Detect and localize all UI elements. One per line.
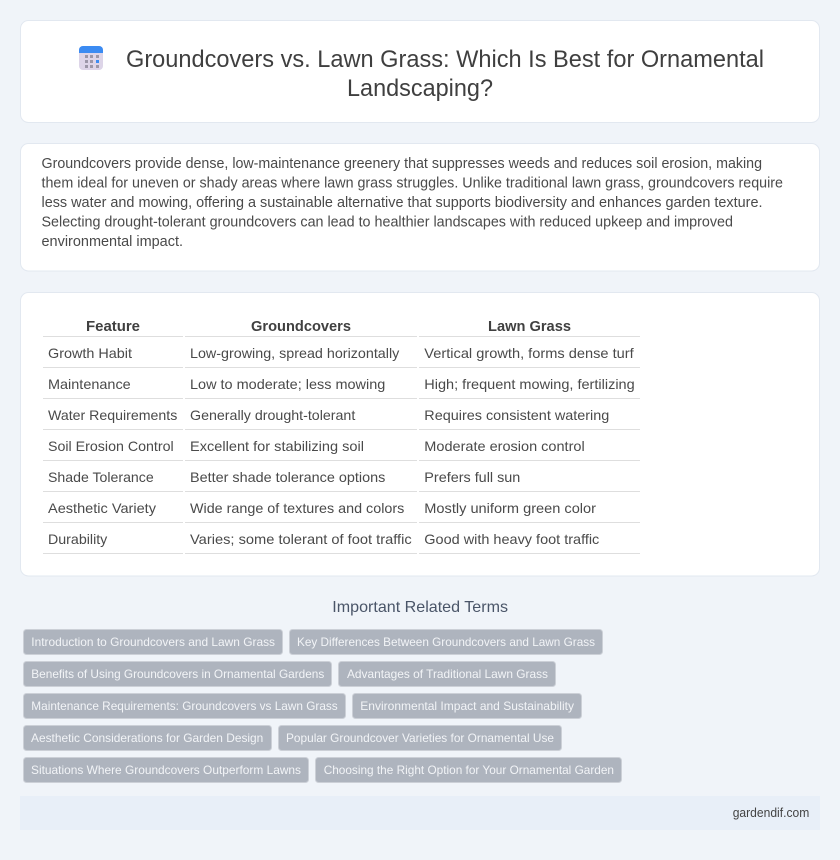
table row: maintenance: Maintenance bbox=[48, 376, 131, 392]
tag: popular varieties: Popular Groundcover Varieties for Ornamental Use bbox=[286, 731, 554, 745]
tag: advantages bbox=[338, 662, 556, 686]
table row: durability bbox=[43, 531, 640, 554]
table row: durability: Varies; some tolerant of foot traffic bbox=[190, 531, 412, 547]
text block: introduction paragraph: less water and mowing, offering a sustainable alternative that supports biodiversity and enhances garden texture. bbox=[42, 195, 762, 211]
table row: maintenance bbox=[43, 376, 640, 399]
tag: benefits bbox=[24, 662, 332, 686]
table row: maintenance: Low to moderate; less mowing bbox=[190, 376, 385, 392]
tag: advantages: Advantages of Traditional Lawn Grass bbox=[347, 667, 548, 681]
tag: introduction: Introduction to Groundcovers and Lawn Grass bbox=[31, 635, 275, 649]
tag: popular varieties bbox=[278, 726, 562, 750]
tag: choosing the right option: Choosing the Right Option for Your Ornamental Garden bbox=[324, 763, 614, 777]
table row: growth habit: Low-growing, spread horizontally bbox=[190, 345, 399, 361]
text block: introduction paragraph: them ideal for uneven or shady areas where lawn grass struggles. Unlike traditional lawn grass, groundcovers require bbox=[42, 176, 783, 192]
table row: durability: Durability bbox=[48, 531, 107, 547]
table row: shade tolerance: Better shade tolerance options bbox=[190, 469, 385, 485]
icon: calendar bbox=[79, 46, 103, 70]
text block: introduction paragraph: environmental impact. bbox=[42, 234, 183, 250]
tag: maintenance requirements: Maintenance Requirements: Groundcovers vs Lawn Grass bbox=[31, 699, 338, 713]
table header row: Feature bbox=[86, 319, 140, 335]
panel: introduction bbox=[20, 144, 820, 271]
table row: aesthetic variety: Mostly uniform green color bbox=[424, 500, 596, 516]
text block: introduction paragraph bbox=[42, 156, 783, 250]
text block: introduction paragraph: Groundcovers provide dense, low-maintenance greenery that suppresses weeds and reduces soil erosion, making bbox=[42, 156, 762, 172]
tag: choosing the right option bbox=[316, 758, 622, 782]
table header row: Lawn Grass bbox=[488, 319, 571, 335]
table row: water requirements bbox=[43, 407, 640, 430]
tag: key differences: Key Differences Between Groundcovers and Lawn Grass bbox=[297, 635, 595, 649]
tag: benefits: Benefits of Using Groundcovers in Ornamental Gardens bbox=[31, 667, 324, 681]
table row: soil erosion control: Excellent for stabilizing soil bbox=[190, 438, 364, 454]
tag: aesthetic considerations bbox=[24, 726, 272, 750]
text block: introduction paragraph: Selecting drought-tolerant groundcovers can lead to healthier landscapes with reduced upkeep and improved bbox=[42, 214, 733, 230]
tag: situations bbox=[24, 758, 308, 782]
table row: shade tolerance: Prefers full sun bbox=[424, 469, 520, 485]
footer bbox=[20, 796, 820, 830]
table row: growth habit: Growth Habit bbox=[48, 345, 132, 361]
section: important related terms bbox=[24, 599, 622, 782]
table header row bbox=[43, 319, 640, 337]
table row: soil erosion control bbox=[43, 438, 640, 461]
heading: important related terms: Important Related Terms bbox=[332, 599, 508, 616]
tag: introduction bbox=[24, 630, 282, 654]
table row: growth habit bbox=[43, 345, 640, 368]
title: Landscaping? bbox=[347, 75, 493, 102]
table header row: Groundcovers bbox=[251, 319, 351, 335]
panel: title header bbox=[20, 20, 820, 122]
title bbox=[126, 46, 764, 102]
table row: water requirements: Generally drought-tolerant bbox=[190, 407, 355, 423]
table row: water requirements: Requires consistent watering bbox=[424, 407, 609, 423]
table row: aesthetic variety: Wide range of textures and colors bbox=[190, 500, 404, 516]
table row: aesthetic variety bbox=[43, 500, 640, 523]
table row: durability: Good with heavy foot traffic bbox=[424, 531, 599, 547]
table row: water requirements: Water Requirements bbox=[48, 407, 177, 423]
table row: shade tolerance bbox=[43, 469, 640, 492]
tag: environmental impact: Environmental Impact and Sustainability bbox=[360, 699, 574, 713]
tag: situations: Situations Where Groundcovers Outperform Lawns bbox=[31, 763, 301, 777]
table row: soil erosion control: Soil Erosion Control bbox=[48, 438, 174, 454]
tag: maintenance requirements bbox=[24, 694, 346, 718]
title: Groundcovers vs. Lawn Grass: Which Is Best for Ornamental bbox=[126, 46, 764, 73]
tag: environmental impact bbox=[352, 694, 582, 718]
table row: aesthetic variety: Aesthetic Variety bbox=[48, 500, 156, 516]
tag: aesthetic considerations: Aesthetic Considerations for Garden Design bbox=[31, 731, 263, 745]
table row: shade tolerance: Shade Tolerance bbox=[48, 469, 154, 485]
footer: gardendif.com bbox=[733, 806, 809, 820]
table row: growth habit: Vertical growth, forms dense turf bbox=[424, 345, 634, 361]
panel: comparison table bbox=[20, 292, 820, 576]
table row: soil erosion control: Moderate erosion control bbox=[424, 438, 585, 454]
tag: key differences bbox=[290, 630, 602, 654]
table row: maintenance: High; frequent mowing, fertilizing bbox=[424, 376, 635, 392]
